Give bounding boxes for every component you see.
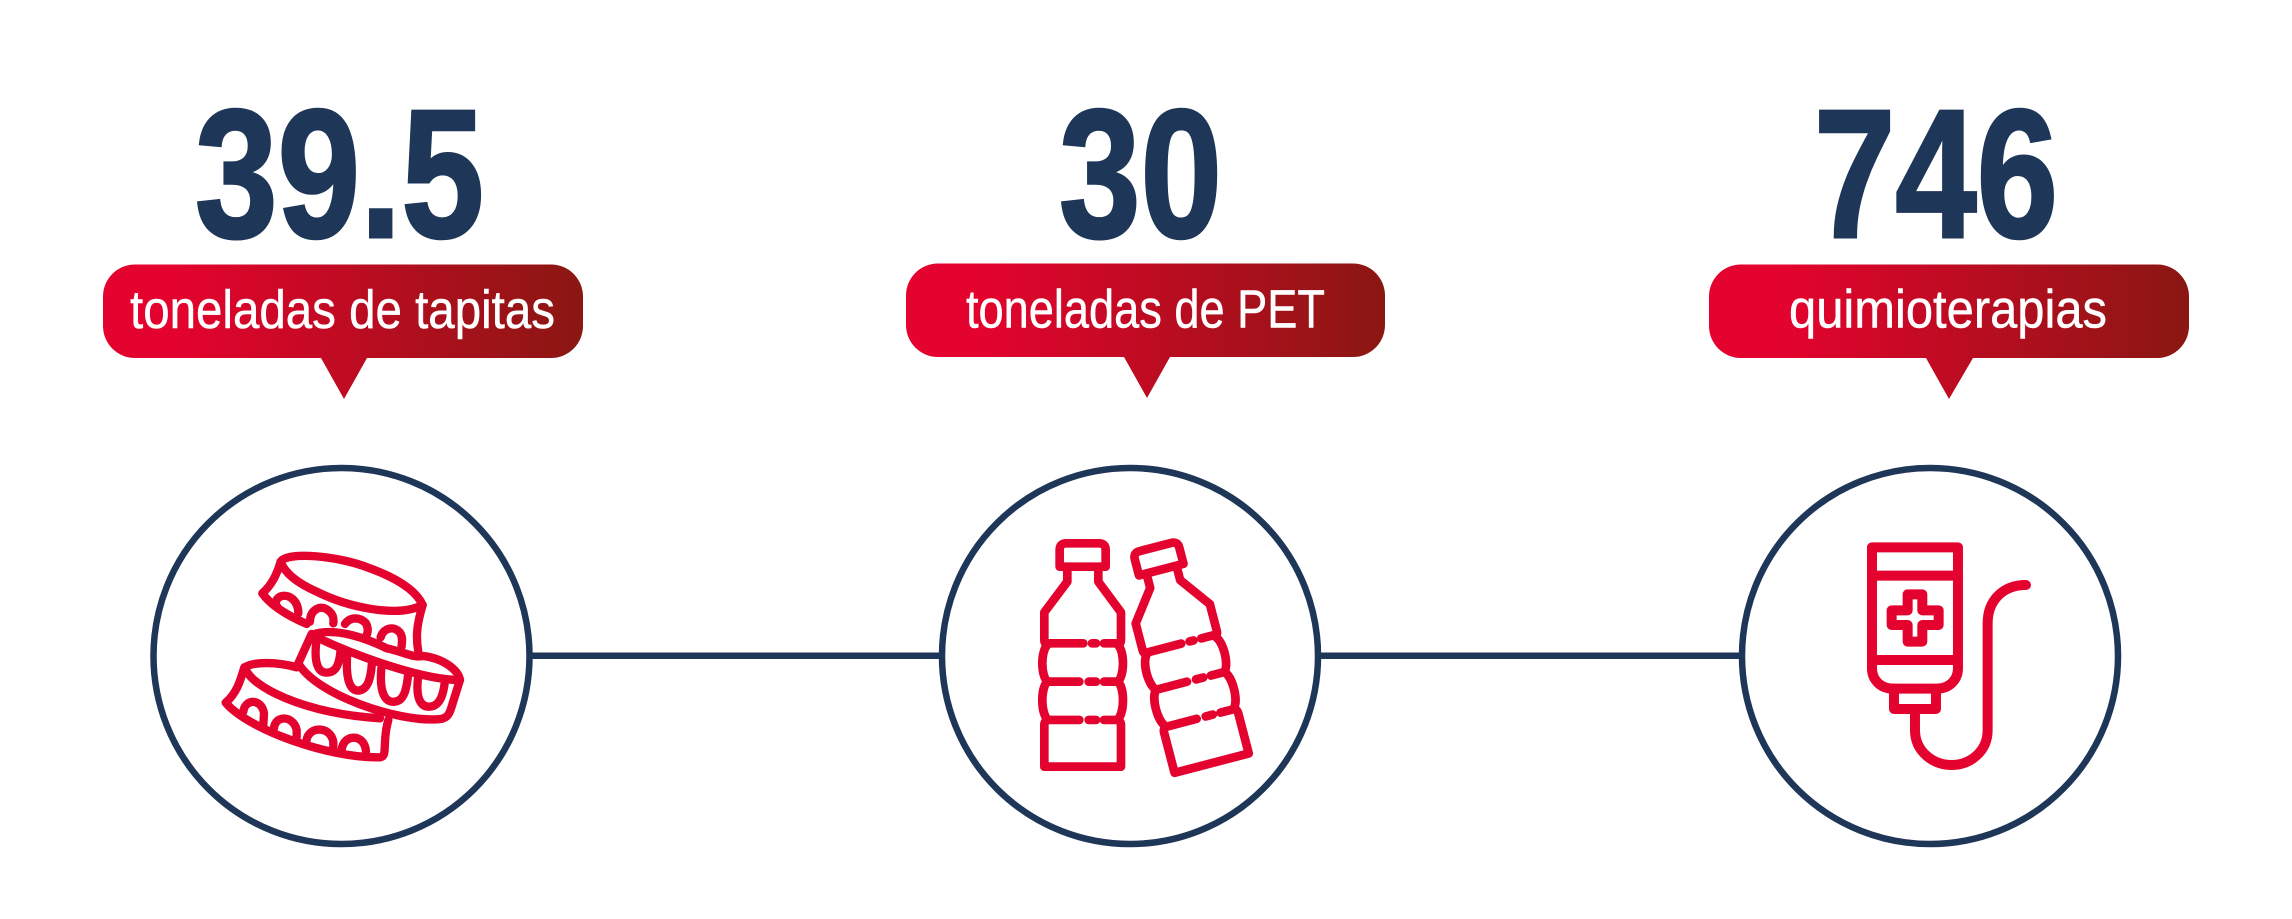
- bottom cap: [226, 663, 388, 757]
- top cap: [262, 556, 423, 652]
- middle cap: [298, 632, 460, 719]
- medical cross: [1892, 594, 1939, 642]
- connector line: first to second circle: [528, 652, 940, 659]
- number: 746: 746: [1814, 71, 2058, 276]
- callout: toneladas de PET: [906, 264, 1385, 398]
- callout: toneladas de tapitas: toneladas de tapitas: [130, 280, 555, 340]
- callout: toneladas de tapitas: [103, 264, 583, 399]
- stat column: PET: [906, 71, 1385, 844]
- icon: plastic bottles: [1042, 537, 1251, 773]
- left bottle: [1042, 543, 1123, 767]
- connector line: second to third circle: [1320, 652, 1742, 659]
- number: 30: 30: [1059, 71, 1222, 276]
- callout: quimioterapias: [1709, 264, 2189, 399]
- circle: tapitas: [154, 468, 530, 844]
- callout: quimioterapias: quimioterapias: [1789, 280, 2107, 340]
- circle: PET: [942, 468, 1318, 844]
- bag body: [1872, 547, 1958, 689]
- number: 39.5: 39.5: [195, 71, 484, 276]
- circle: quimioterapias: [1742, 468, 2118, 844]
- stat column: quimioterapias: [1709, 71, 2189, 844]
- icon: bottle caps: [226, 556, 460, 757]
- icon: chemotherapy IV bag: [1872, 547, 2026, 765]
- tube: [1915, 585, 2026, 765]
- right bottle: [1116, 537, 1251, 773]
- callout: toneladas de PET: toneladas de PET: [966, 280, 1325, 340]
- stat column: tapitas: [103, 71, 583, 844]
- connector: [1894, 689, 1936, 709]
